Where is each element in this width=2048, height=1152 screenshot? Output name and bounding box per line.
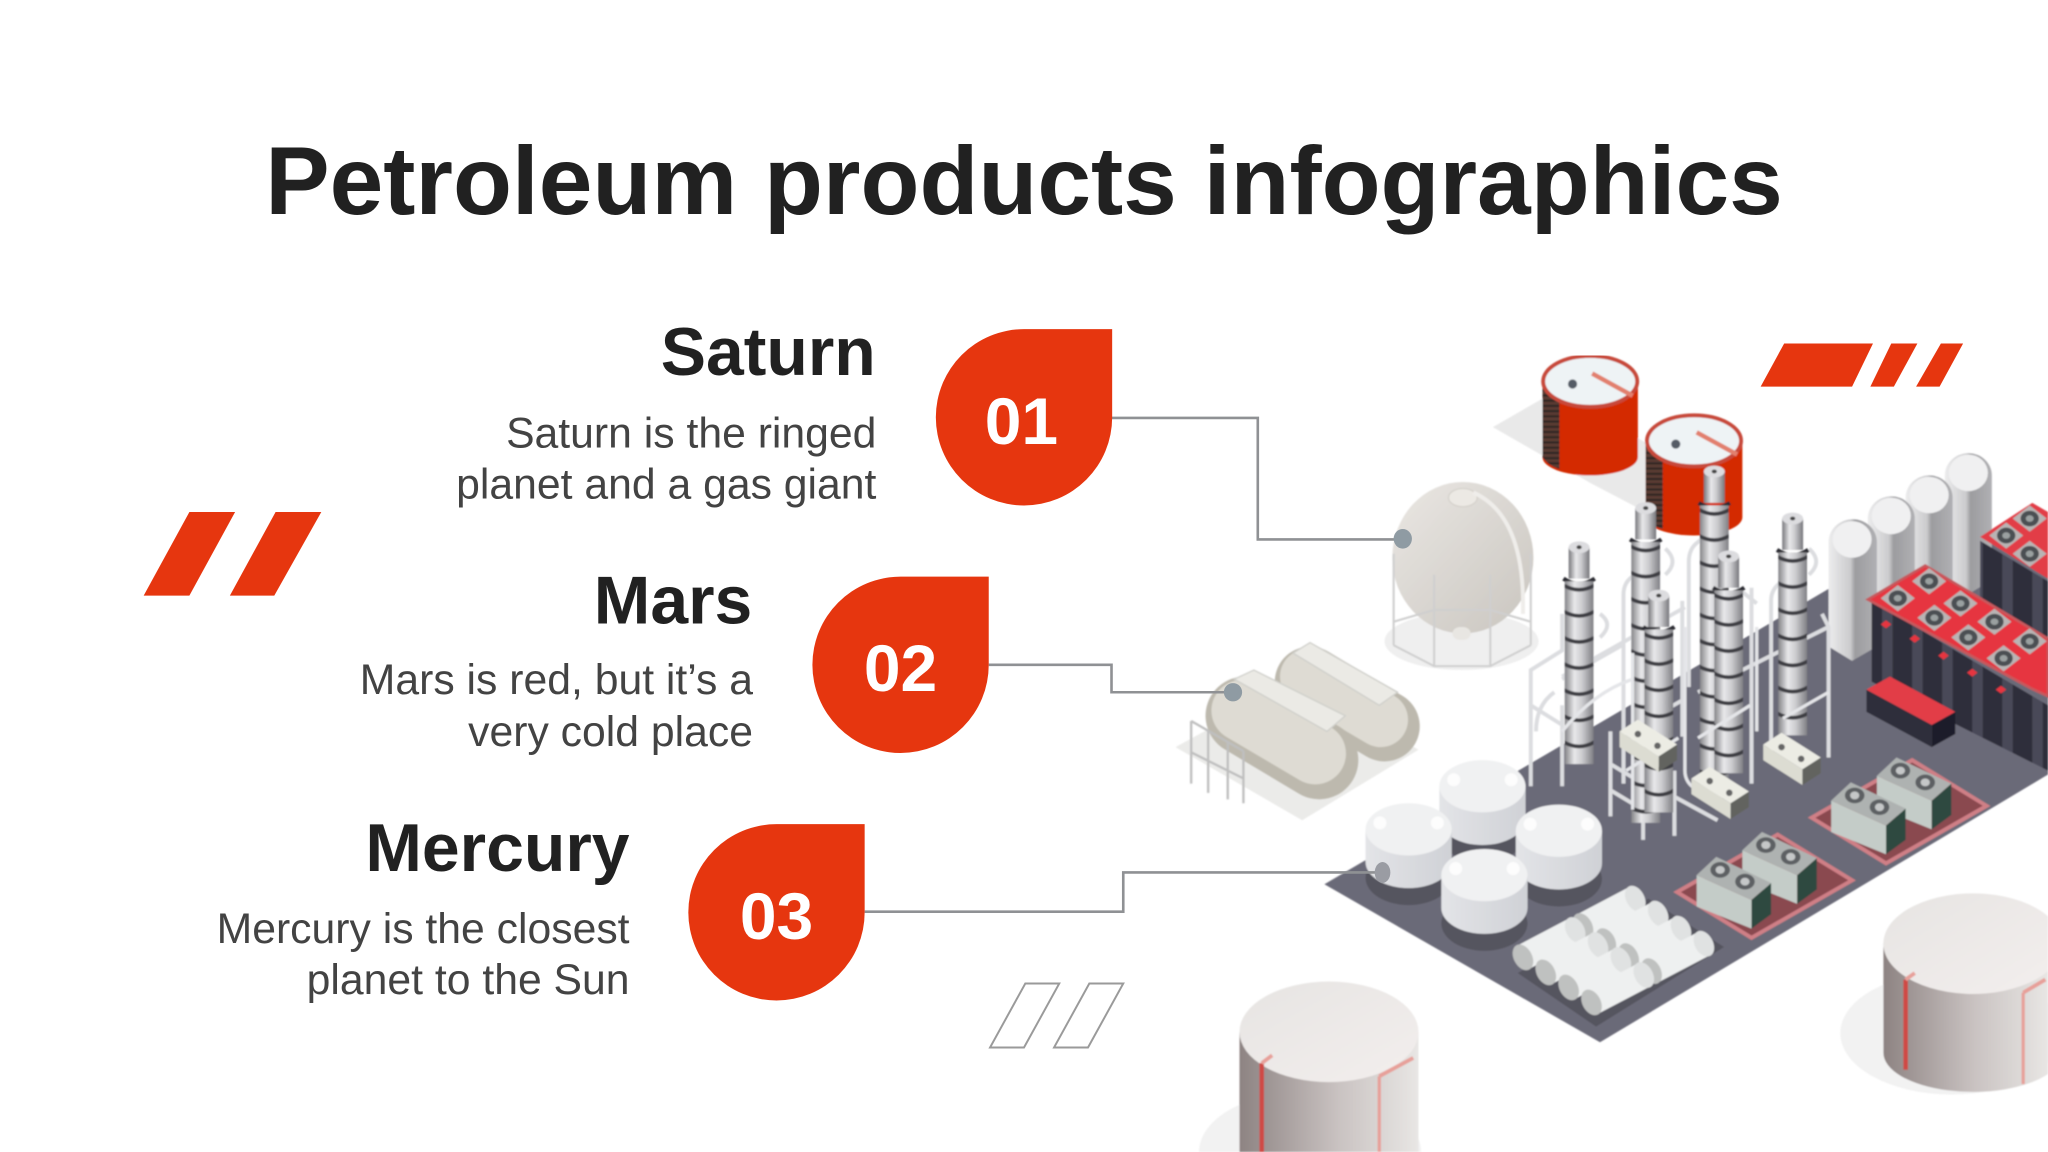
large tank right <box>1840 893 2048 1095</box>
tower 2 <box>1630 502 1661 823</box>
badge 02: 02 <box>864 631 937 705</box>
cooler group rear <box>1812 758 1987 863</box>
item 02: Mars <box>360 564 989 756</box>
silos: four tall grey cylinders <box>1829 453 1992 661</box>
pipework in front of towers <box>1562 627 1829 810</box>
connector 03 to white tank <box>865 862 1390 912</box>
heading: Mercury: Mercury <box>365 811 630 886</box>
connector 02 to capsule tanks <box>989 665 1242 701</box>
distillation towers with pipework <box>1531 466 1829 840</box>
pipework behind towers <box>1531 522 1829 840</box>
tower 4 <box>1777 513 1808 735</box>
illustration: refinery complex <box>1176 356 2048 1152</box>
front red-roof unit <box>1868 566 2048 771</box>
tower 3 <box>1699 466 1730 799</box>
item 01: Saturn <box>456 315 1112 508</box>
description: Saturn: Saturn is the ringed <box>506 409 876 457</box>
pump platform centre <box>1691 767 1749 819</box>
rear red-roof unit <box>1980 503 2048 653</box>
tower 1 <box>1563 541 1595 764</box>
decoration: red slashes right <box>1761 344 1963 387</box>
red storage tanks <box>1493 356 1742 536</box>
heading: Mars: Mars <box>594 564 752 639</box>
pump platform right <box>1763 733 1821 785</box>
heading: Saturn: Saturn <box>661 315 876 390</box>
connector 01 to sphere <box>1112 418 1412 549</box>
description: Mars: very cold place <box>468 708 753 756</box>
pump platform left <box>1620 720 1677 772</box>
badge 03: 03 <box>740 879 813 953</box>
tower 5 <box>1643 590 1674 812</box>
decoration: outlined slashes <box>990 984 1123 1048</box>
decoration: red slashes left <box>144 512 321 596</box>
pipe bundle <box>1508 882 1724 1027</box>
badge 02 <box>812 577 989 753</box>
small red-roof control building <box>1866 677 1955 747</box>
description: Saturn: planet and a gas giant <box>456 460 877 508</box>
description: Mercury: planet to the Sun <box>307 956 630 1004</box>
white storage tanks <box>1366 760 1602 951</box>
tower 6 <box>1713 551 1744 773</box>
horizontal capsule tanks <box>1176 643 1418 820</box>
badge 01: 01 <box>985 384 1058 458</box>
title: Petroleum products infographics <box>265 128 1783 235</box>
cooler group front <box>1677 832 1852 938</box>
gas sphere on legs <box>1384 482 1539 670</box>
large tank bottom <box>1199 982 1421 1152</box>
badge 01 <box>936 329 1112 505</box>
item 03: Mercury <box>217 811 865 1004</box>
description: Mercury: Mercury is the closest <box>217 905 630 953</box>
description: Mars: Mars is red, but it’s a <box>360 656 753 704</box>
badge 03 <box>688 824 865 1000</box>
ground plate <box>1324 522 2048 1042</box>
